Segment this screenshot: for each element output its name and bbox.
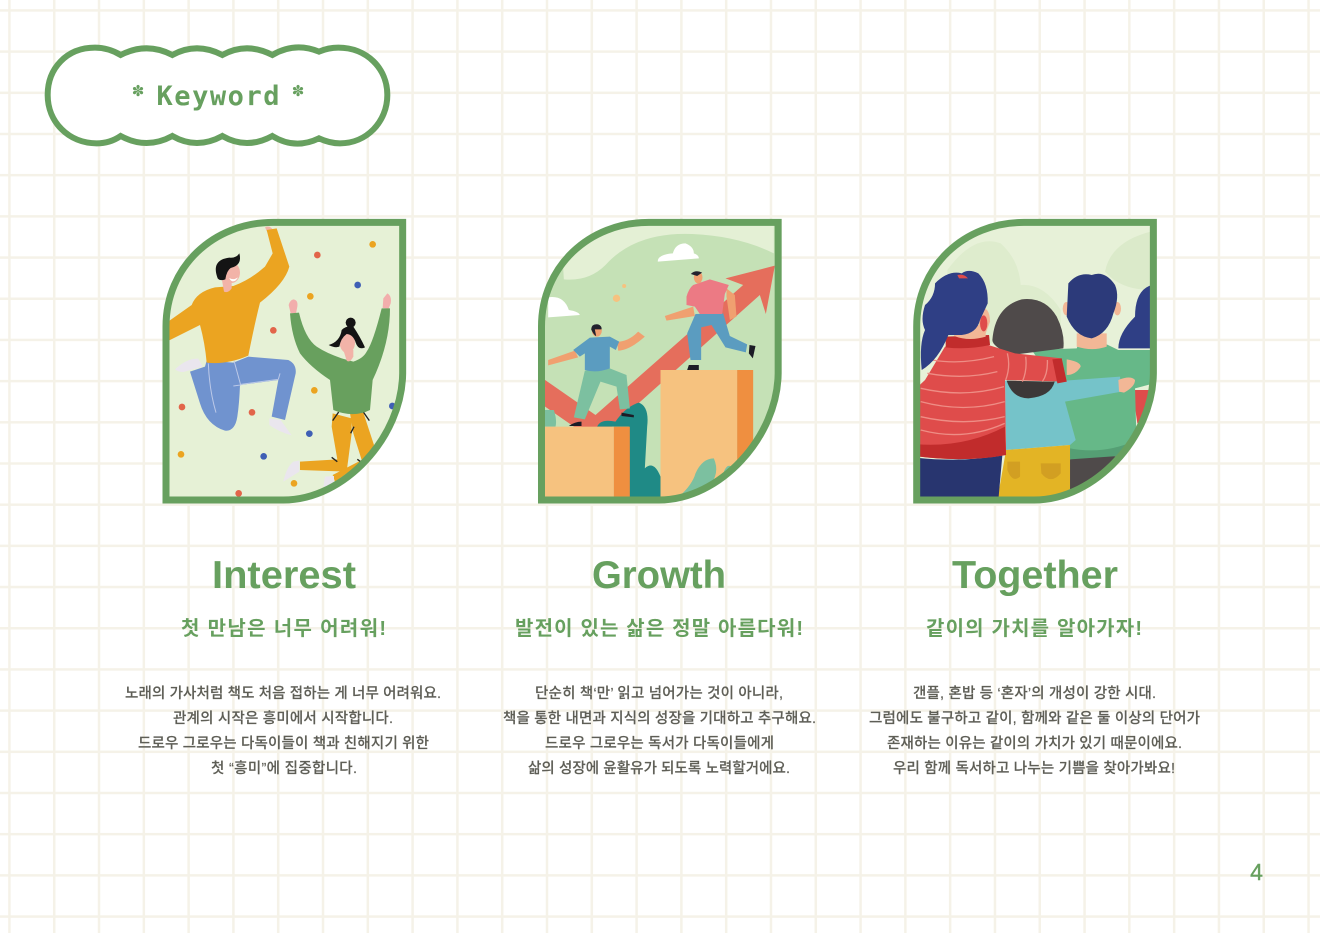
subheading: 같이의 가치를 알아가자! (926, 617, 1142, 640)
illustration: Interest leaf (170, 226, 400, 496)
column: Interest (125, 554, 441, 777)
body text: 삶의 성장에 윤활유가 되도록 노력할거에요. (528, 760, 790, 777)
body text: 책을 통한 내면과 지식의 성장을 기대하고 추구해요. (503, 710, 816, 727)
leaf frame: Growth (541, 222, 778, 500)
body text (503, 685, 816, 777)
subheading: 발전이 있는 삶은 정말 아름다워! (515, 617, 803, 640)
body text: 갠플, 혼밥 등 ‘혼자’의 개성이 강한 시대. (913, 685, 1156, 702)
keyword heading: Keyword (156, 81, 280, 112)
body text: 드로우 그로우는 독서가 다독이들에게 (545, 735, 774, 752)
column: Together (869, 554, 1200, 777)
body text: 우리 함께 독서하고 나누는 기쁨을 찾아가봐요! (893, 760, 1175, 777)
body text: 노래의 가사처럼 책도 처음 접하는 게 너무 어려워요. (125, 685, 441, 702)
body text: 드로우 그로우는 다독이들이 책과 친해지기 위한 (138, 735, 429, 752)
body text: 첫 “흥미”에 집중합니다. (211, 760, 357, 777)
body text: 존재하는 이유는 같이의 가치가 있기 때문이에요. (887, 735, 1182, 752)
illustration: Together leaf (920, 226, 1150, 496)
leaf frame: Interest (166, 222, 403, 500)
body text (869, 685, 1200, 777)
illustration: Growth leaf (545, 226, 775, 496)
left asterisk: ✽ (132, 82, 144, 100)
keyword badge (48, 47, 387, 144)
column: Growth (503, 554, 816, 777)
right asterisk: ✽ (292, 82, 304, 100)
heading: Together (952, 554, 1118, 597)
body text: 단순히 책‘만’ 읽고 넘어가는 것이 아니라, (535, 685, 783, 702)
body text: 그럼에도 불구하고 같이, 함께와 같은 둘 이상의 단어가 (869, 710, 1200, 727)
heading: Growth (592, 554, 726, 597)
heading: Interest (212, 554, 356, 597)
body text (125, 685, 441, 777)
subheading: 첫 만남은 너무 어려워! (181, 617, 386, 640)
leaf frame: Together (917, 222, 1153, 500)
cloud outline (48, 47, 387, 144)
page number: 4 (1250, 859, 1263, 885)
body text: 관계의 시작은 흥미에서 시작합니다. (173, 710, 393, 727)
